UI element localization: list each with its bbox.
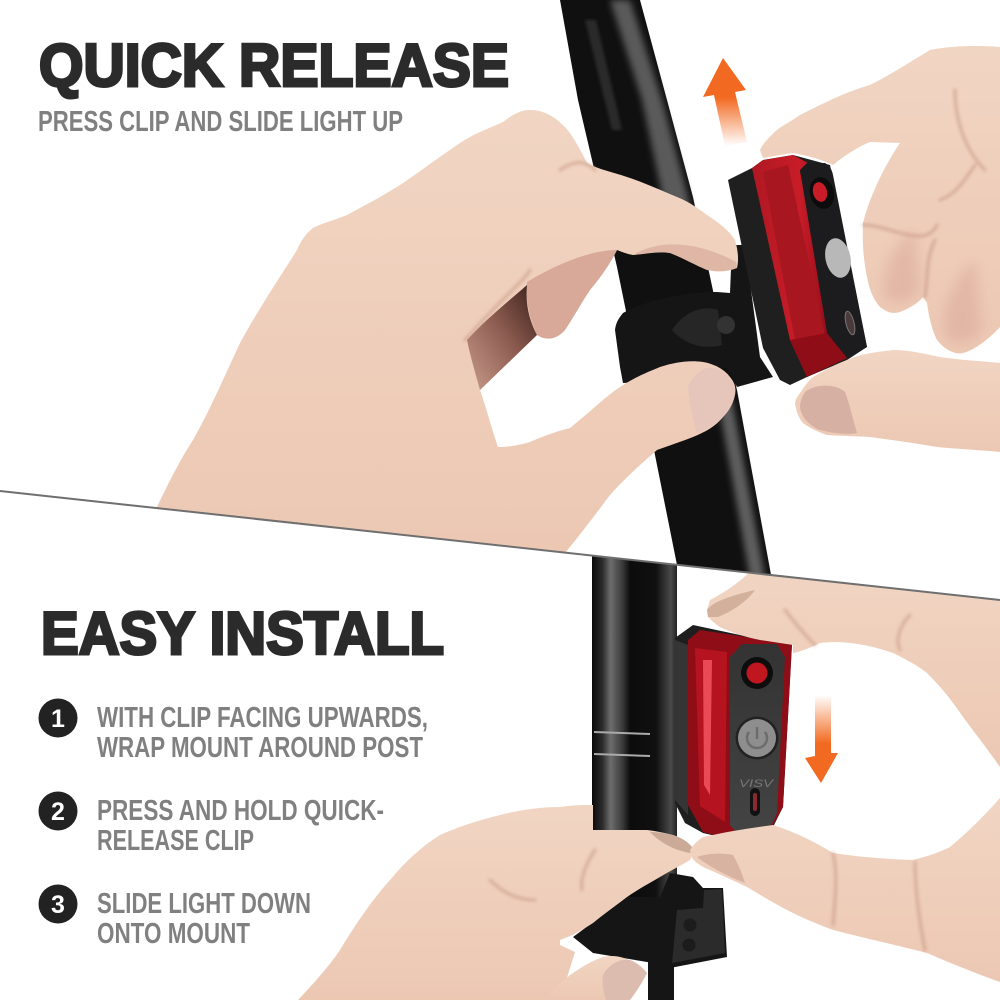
photo: quick release bbox=[150, 0, 1000, 580]
fingernail bbox=[707, 590, 755, 617]
rear light: VISV bbox=[739, 778, 775, 790]
step 2: PRESS AND HOLD QUICK- bbox=[97, 795, 384, 827]
right hand bbox=[760, 46, 1000, 452]
divider bbox=[0, 491, 1000, 600]
icon: down arrow bbox=[805, 695, 838, 783]
mount bbox=[573, 873, 727, 968]
step 1: 1 bbox=[51, 705, 65, 733]
curled middle finger bbox=[527, 250, 617, 339]
step 3: 3 bbox=[51, 891, 65, 919]
rear light bbox=[675, 625, 792, 840]
left hand bbox=[150, 110, 738, 553]
fingernail bbox=[650, 832, 692, 853]
thumbnail bbox=[697, 854, 745, 883]
index underside shade bbox=[633, 244, 737, 271]
mount bbox=[615, 245, 773, 387]
subtitle: PRESS CLIP AND SLIDE LIGHT UP bbox=[38, 106, 403, 138]
rear light bbox=[728, 155, 867, 385]
top right hand bbox=[690, 560, 1000, 982]
lower left hand bbox=[298, 805, 692, 1000]
step 3: SLIDE LIGHT DOWN bbox=[97, 888, 311, 920]
thumb bbox=[795, 350, 1000, 452]
palm shadow bbox=[467, 285, 537, 390]
step 3: ONTO MOUNT bbox=[97, 918, 250, 950]
seat post bbox=[560, 0, 772, 580]
icon: up arrow bbox=[703, 58, 747, 146]
thumbnail bbox=[800, 386, 857, 434]
step 1: WRAP MOUNT AROUND POST bbox=[97, 732, 423, 764]
bottom right thumb bbox=[690, 798, 1000, 982]
title: quick release: QUICK RELEASE bbox=[39, 32, 509, 99]
title: easy install: EASY INSTALL bbox=[41, 600, 444, 667]
thumbnail bbox=[603, 960, 647, 1000]
photo: easy install bbox=[298, 540, 1000, 1000]
thumbnail bbox=[698, 368, 736, 419]
step 2 bbox=[38, 792, 384, 857]
step 1 bbox=[38, 698, 428, 764]
step 2: 2 bbox=[51, 798, 65, 826]
step 3 bbox=[38, 884, 311, 950]
step 1: WITH CLIP FACING UPWARDS, bbox=[97, 702, 428, 734]
lower thumb bbox=[560, 956, 647, 1000]
step 2: RELEASE CLIP bbox=[97, 825, 254, 857]
seat post bbox=[592, 540, 677, 1000]
